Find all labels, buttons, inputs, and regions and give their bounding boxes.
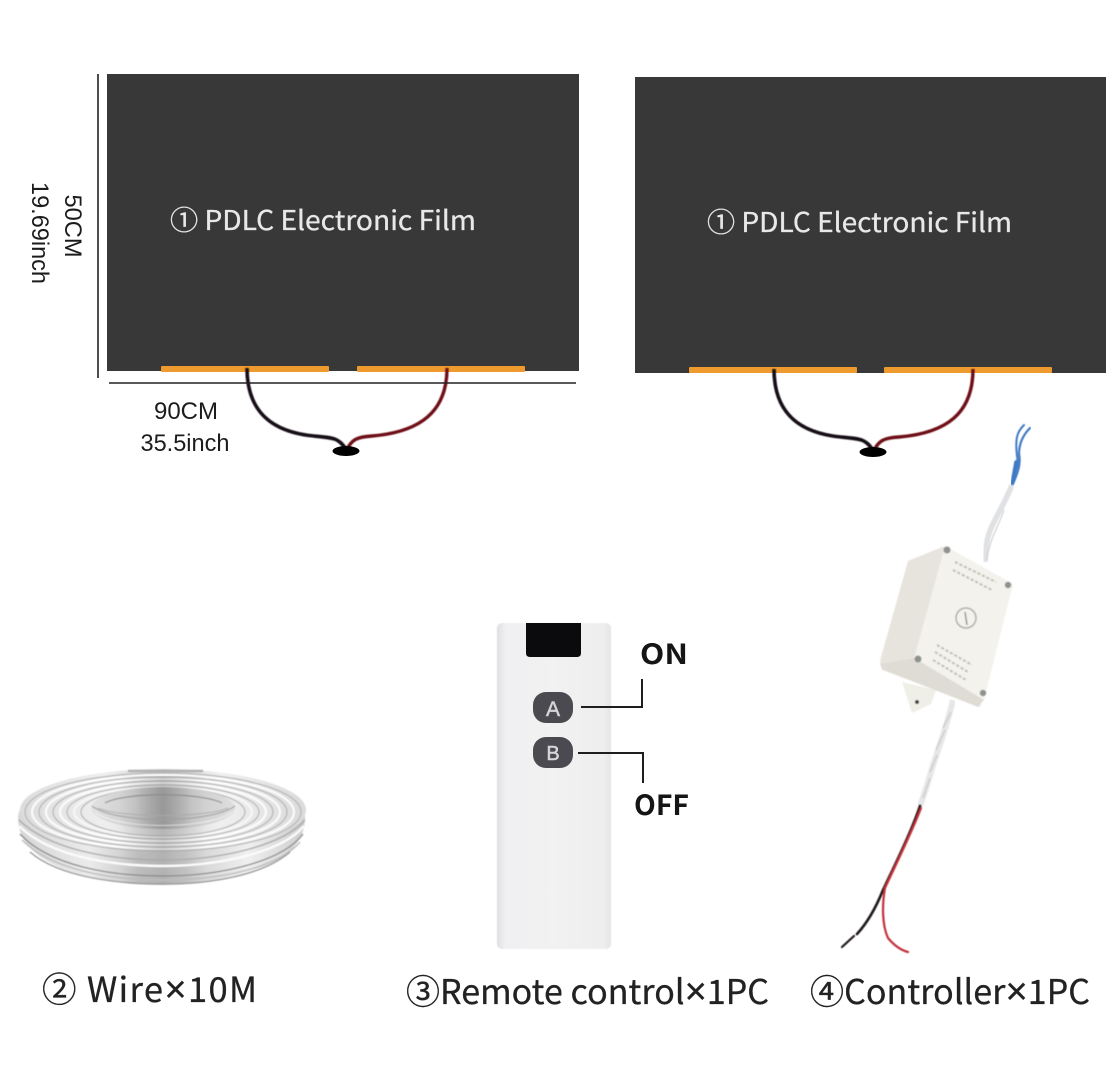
button B: B	[546, 743, 560, 765]
film label left: ① PDLC Electronic Film	[170, 199, 476, 238]
controller box	[880, 546, 1013, 713]
right film busbars and wires	[689, 367, 1052, 457]
width dimension labels: 90CM	[154, 398, 218, 425]
callout: OFF: OFF	[634, 784, 689, 824]
icon: wire coil	[18, 769, 306, 885]
height dimension line	[97, 74, 99, 378]
film label right: ① PDLC Electronic Film	[707, 201, 1012, 240]
panel: right PDLC film	[635, 77, 1106, 373]
callout: ON	[581, 633, 688, 707]
button A: A	[546, 698, 560, 721]
width dimension labels	[140, 398, 230, 457]
left film busbars and wires	[161, 366, 525, 456]
width dimension line	[109, 382, 576, 384]
height dimension labels	[26, 182, 86, 284]
width dimension labels: 35.5inch	[140, 430, 230, 457]
upper blue leads	[1012, 425, 1030, 484]
black and red leads	[842, 806, 921, 952]
height dimension labels: 50CM	[59, 194, 86, 258]
button A	[533, 692, 573, 723]
upper white lead	[985, 485, 1012, 562]
caption: wire: ② Wire×10M	[42, 962, 257, 1012]
remote window	[526, 623, 581, 657]
height dimension labels: 19.69inch	[26, 182, 53, 284]
panel: left PDLC film	[107, 74, 579, 371]
callout: OFF	[578, 753, 689, 824]
button B	[533, 737, 573, 768]
lower white lead	[920, 700, 953, 806]
caption: remote control: ③Remote control×1PC	[406, 965, 769, 1014]
callout: ON: ON	[640, 633, 688, 673]
icon: controller with leads	[842, 425, 1030, 952]
icon: remote control	[497, 623, 611, 949]
caption: controller: ④Controller×1PC	[810, 965, 1090, 1014]
